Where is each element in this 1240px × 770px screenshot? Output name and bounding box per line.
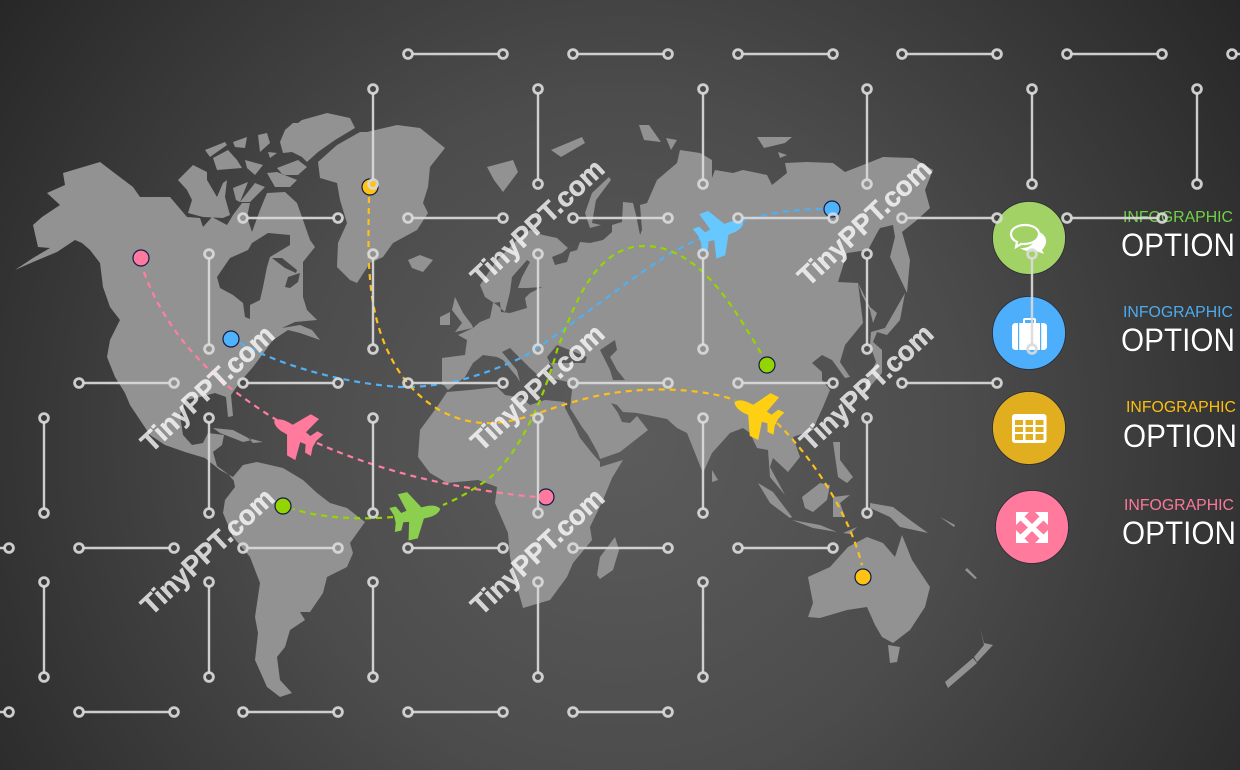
option label: green <box>1121 209 1235 263</box>
watermarks: TinyPPT.com <box>134 482 280 621</box>
Madagascar <box>597 537 619 579</box>
pin: green south america <box>275 498 291 514</box>
route: blue <box>240 209 822 387</box>
route: yellow <box>368 197 862 565</box>
option label: blue: OPTION <box>1121 322 1235 358</box>
location pins <box>133 179 871 585</box>
North America <box>15 162 320 482</box>
Greenland <box>318 125 445 283</box>
flight routes <box>144 197 862 565</box>
Arctic islands <box>178 113 355 218</box>
route: green <box>293 246 761 518</box>
icon: blue plane <box>689 201 752 263</box>
icon: green plane <box>387 486 446 543</box>
watermarks: TinyPPT.com <box>793 318 939 457</box>
pin: yellow australia <box>855 569 871 585</box>
Sri Lanka <box>712 470 718 482</box>
icon: table <box>1012 414 1046 443</box>
Svalbard and northern islands <box>487 125 792 228</box>
watermarks: TinyPPT.com <box>464 482 610 621</box>
option circle: gold <box>992 392 1066 464</box>
pin: pink africa <box>538 489 554 505</box>
option label: pink <box>1122 497 1236 551</box>
route: pink <box>144 272 537 497</box>
South America <box>223 462 365 697</box>
Africa <box>418 387 623 608</box>
icon: expand arrows <box>1016 512 1048 543</box>
option label: green: OPTION <box>1121 227 1235 263</box>
Iceland <box>408 255 433 272</box>
option circle: green <box>992 202 1066 274</box>
watermarks: TinyPPT.com <box>134 319 280 458</box>
Tasmania <box>888 645 900 663</box>
option label: yellow: INFOGRAPHIC <box>1126 399 1236 416</box>
Southeast Asia islands <box>758 442 977 579</box>
pin: yellow greenland <box>362 179 378 195</box>
option label: yellow <box>1123 399 1237 454</box>
option label: blue: INFOGRAPHIC <box>1123 304 1233 321</box>
watermarks: TinyPPT.com <box>464 318 610 457</box>
option label: green: INFOGRAPHIC <box>1123 209 1233 226</box>
Eurasia <box>442 150 933 495</box>
option label: pink: INFOGRAPHIC <box>1124 497 1234 514</box>
icon: suitcase <box>1012 318 1047 350</box>
Cuba and Hispaniola <box>213 428 263 443</box>
Japan and Sakhalin <box>858 283 905 390</box>
watermarks <box>134 153 939 621</box>
world map <box>15 113 993 697</box>
New Zealand <box>945 628 993 688</box>
legend circles <box>992 202 1068 564</box>
pin: pink north america <box>133 250 149 266</box>
option circle: pink <box>996 490 1068 564</box>
icon: yellow plane <box>724 381 789 445</box>
icon: pink plane <box>262 400 329 466</box>
pin: blue north america <box>223 331 239 347</box>
pin: green china <box>759 357 775 373</box>
Australia <box>808 535 930 643</box>
watermarks: TinyPPT.com <box>791 153 937 292</box>
watermarks: TinyPPT.com <box>464 153 610 292</box>
option label: blue <box>1121 304 1235 358</box>
option circle: blue <box>992 296 1066 370</box>
pin: blue russia <box>824 201 840 217</box>
icon: chat bubbles <box>1011 225 1046 254</box>
British Isles <box>440 297 473 332</box>
